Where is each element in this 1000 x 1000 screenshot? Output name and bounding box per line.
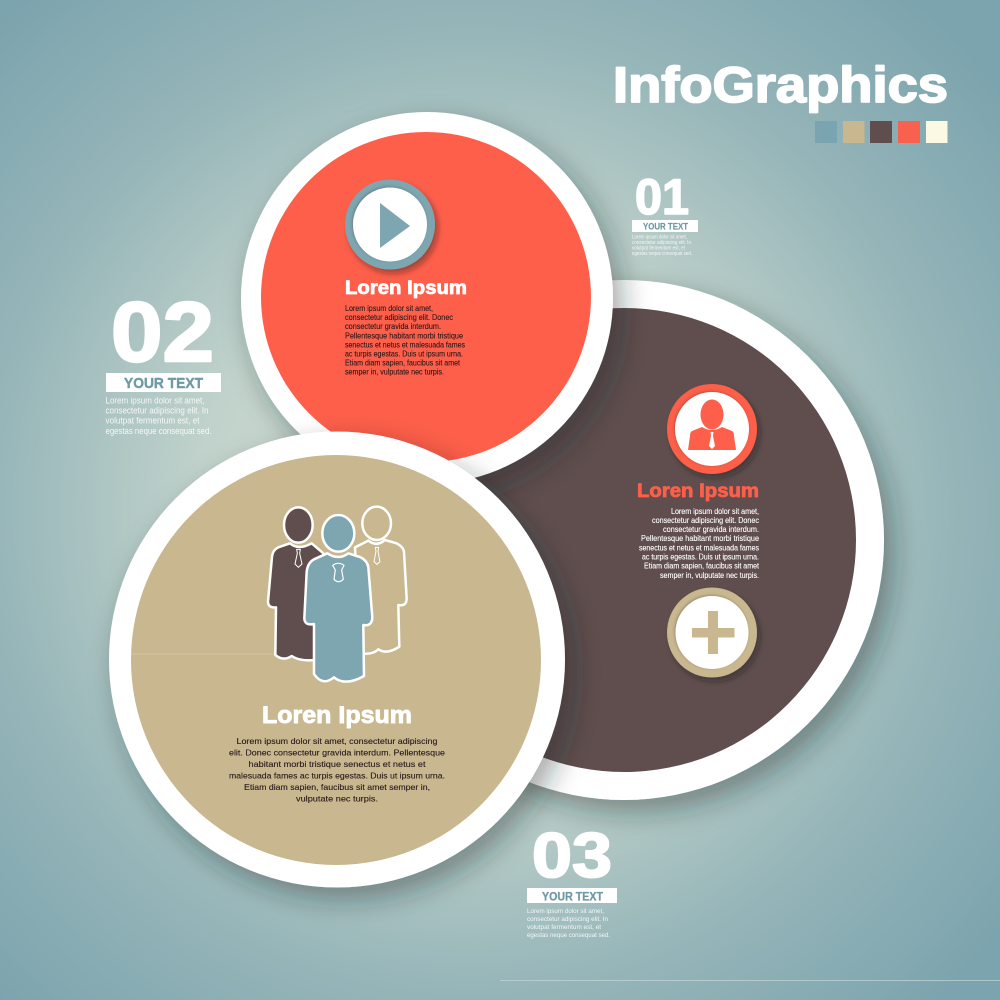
panel: tan circle: [109, 432, 565, 888]
callout 01: [632, 169, 698, 257]
callout 02: 02: [111, 285, 214, 379]
person: right, outline: [355, 507, 407, 654]
callout 02: YOUR TEXT: [124, 376, 203, 392]
text block: red panel: Pellentesque habitant morbi tristique: [345, 330, 463, 340]
text block: red panel: Lorem ipsum dolor sit amet,: [345, 303, 433, 313]
callout 01: 01: [635, 169, 689, 225]
callout 02: volutpat fermentum est, et: [106, 416, 200, 426]
heading: brown panel: Loren Ipsum: [637, 480, 759, 502]
heading: tan panel: Loren Ipsum: [262, 702, 412, 729]
heading: red panel: Loren Ipsum: [345, 277, 467, 299]
text block: red panel: senectus et netus et malesuada fames: [345, 339, 465, 349]
callout 01: YOUR TEXT: [643, 222, 688, 232]
callout 03: YOUR TEXT: [542, 890, 604, 904]
text block: brown panel: Lorem ipsum dolor sit amet,: [671, 506, 759, 516]
text block: brown panel: [639, 506, 760, 580]
text block: brown panel: Etiam diam sapien, faucibus sit amet: [644, 560, 760, 570]
text block: brown panel: Pellentesque habitant morbi tristique: [641, 533, 759, 543]
text block: tan panel: malesuada fames ac turpis egestas. Duis ut ipsum urna.: [229, 770, 445, 780]
callout 02: consectetur adipiscing elit. In: [106, 406, 208, 416]
icon: plus badge: [667, 588, 757, 678]
callout 03: volutpat fermentum est, et: [527, 924, 601, 931]
callout 03: egestas neque consequat sed.: [527, 932, 610, 939]
text block: brown panel: consectetur adipiscing elit. Donec: [652, 515, 760, 525]
text block: red panel: semper in, vulputate nec turpis.: [345, 367, 444, 377]
colour swatches: [815, 121, 948, 143]
callout 03: 03: [532, 821, 612, 891]
callout 03: consectetur adipiscing elit. In: [527, 916, 609, 923]
callout 01: Lorem ipsum dolor sit amet,: [632, 234, 687, 240]
callout 02: [106, 285, 221, 436]
title: InfoGraphics: [613, 57, 948, 113]
text block: tan panel: elit. Donec consectetur gravida interdum. Pellentesque: [229, 748, 445, 758]
text block: brown panel: senectus et netus et malesuada fames: [639, 542, 759, 552]
text block: brown panel: semper in, vulputate nec turpis.: [660, 570, 759, 580]
callout 01: egestas neque consequat sed.: [632, 251, 692, 257]
text block: brown panel: ac turpis egestas. Duis ut ipsum urna.: [642, 552, 759, 562]
person: left, brown: [268, 507, 323, 660]
text block: red panel: consectetur gravida interdum.: [345, 321, 441, 331]
callout 02: Lorem ipsum dolor sit amet,: [106, 396, 204, 406]
panel: brown circle: [364, 280, 884, 800]
callout 03: Lorem ipsum dolor sit amet,: [527, 908, 604, 915]
icon: play badge: [345, 180, 435, 270]
icon: three business people: [268, 507, 407, 682]
callout 01: volutpat fermentum est, et: [632, 246, 686, 252]
icon: person badge: [667, 384, 757, 474]
text block: tan panel: Lorem ipsum dolor sit amet, consectetur adipiscing: [236, 736, 438, 746]
text block: tan panel: vulputate nec turpis.: [296, 794, 378, 804]
callout 02: egestas neque consequat sed.: [106, 426, 212, 436]
callout 01: consectetur adipiscing elit. In: [632, 240, 691, 246]
text block: red panel: ac turpis egestas. Duis ut ipsum urna.: [345, 348, 463, 358]
text block: red panel: consectetur adipiscing elit. Donec: [345, 312, 454, 322]
text block: red panel: Etiam diam sapien, faucibus sit amet: [345, 358, 461, 368]
panel: red circle: [241, 112, 613, 484]
text block: red panel: [345, 303, 465, 377]
callout 03: [527, 821, 617, 939]
text block: tan panel: [229, 736, 445, 804]
person: centre, blue: [304, 515, 372, 682]
text block: brown panel: consectetur gravida interdum.: [663, 524, 759, 534]
text block: tan panel: habitant morbi tristique senectus et netus et: [248, 759, 426, 769]
text block: tan panel: Etiam diam sapien, faucibus sit amet semper in,: [244, 782, 430, 792]
